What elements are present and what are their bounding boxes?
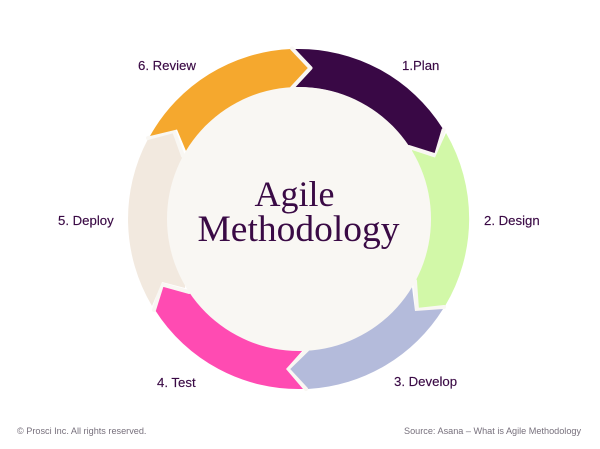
label: 4. Test: 4. Test [157, 375, 196, 390]
footer: source: Source: Asana – What is Agile Methodology [404, 426, 581, 436]
title: Methodology [197, 209, 400, 250]
label: 6. Review: 6. Review [138, 58, 196, 73]
segment: 6 Review [150, 48, 310, 151]
footer: copyright: © Prosci Inc. All rights reserved. [17, 426, 146, 436]
center circle [167, 87, 431, 351]
label: 1.Plan: 1.Plan [402, 58, 439, 73]
agile cycle ring [128, 48, 469, 389]
label: 3. Develop: 3. Develop [394, 374, 457, 389]
segment: 3 Develop [288, 287, 443, 389]
label: 5. Deploy: 5. Deploy [58, 213, 114, 228]
segment: 4 Test [154, 284, 303, 389]
segment: 2 Design [412, 133, 469, 310]
segment: 1 Plan [295, 49, 444, 156]
segment: 5 Deploy [128, 131, 185, 306]
title: Agile [255, 174, 334, 214]
label: 2. Design: 2. Design [484, 213, 540, 228]
